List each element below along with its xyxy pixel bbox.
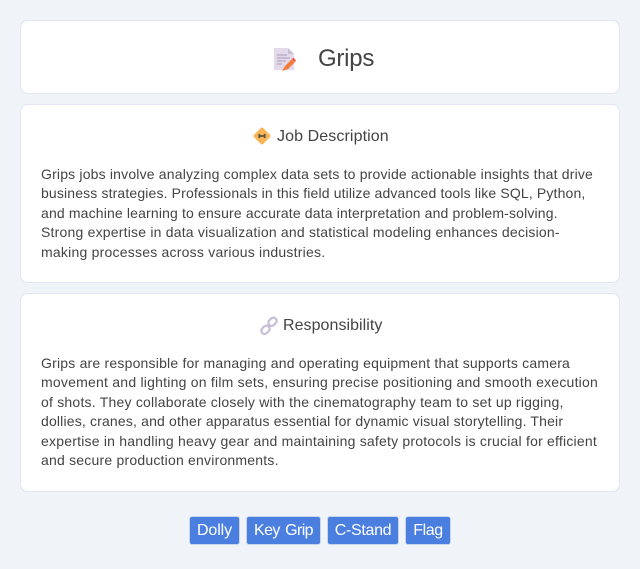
job description text [41,166,593,260]
tag: Dolly: Dolly [197,522,232,539]
tag: Dolly [189,516,240,545]
tag: Key Grip: Key Grip [254,522,313,539]
responsibility text: of shots. They collaborate closely with the cinematography team to set up rigging, [41,394,564,410]
panel: title [20,20,620,94]
job description text: Strong expertise in data visualization and statistical modeling enhances decision- [41,224,560,240]
tag: Key Grip [246,516,321,545]
job description text: and machine learning to ensure accurate data interpretation and problem-solving. [41,205,558,221]
job description text: business strategies. Professionals in this field utilize advanced tools like SQL, Python, [41,185,585,201]
icon: chain link [260,316,278,335]
heading: job description: Job Description [277,128,389,145]
responsibility text: expertise in handling heavy gear and maintaining safety protocols is crucial for efficient [41,433,597,449]
responsibility text [41,355,598,468]
responsibility text: dollies, cranes, and other apparatus essential for dynamic visual storytelling. Their [41,413,563,429]
title text: Grips [318,45,374,72]
tag: Flag [405,516,451,545]
panel: job description [20,104,620,283]
tag: Flag: Flag [413,522,443,539]
heading: responsibility: Responsibility [283,317,382,334]
responsibility text: movement and lighting on film sets, ensuring precise positioning and smooth execution [41,374,598,390]
job description text: making processes across various industries. [41,244,325,260]
job description text: Grips jobs involve analyzing complex data sets to provide actionable insights that drive [41,166,593,182]
panel: responsibility [20,293,620,492]
tag: C-Stand [327,516,399,545]
icon: warning diamond [254,128,270,144]
responsibility text: Grips are responsible for managing and operating equipment that supports camera [41,355,570,371]
tag: C-Stand: C-Stand [335,522,391,539]
icon: document with pencil [274,48,296,71]
responsibility text: and secure production environments. [41,452,279,468]
